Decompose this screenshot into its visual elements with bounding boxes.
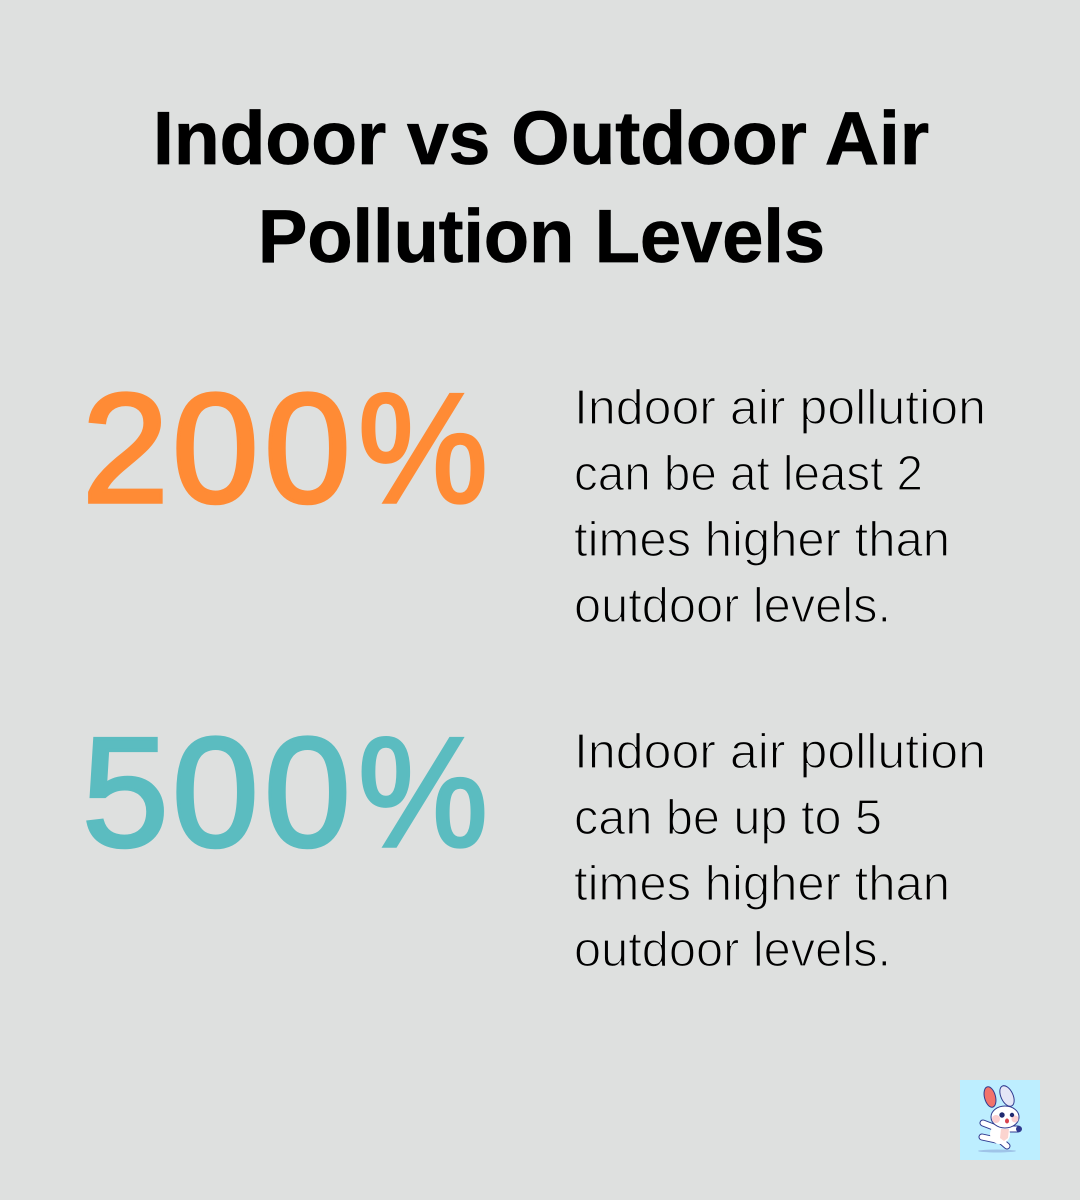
stat: 500%: [82, 706, 488, 880]
text block: 200% description: times higher than: [574, 512, 950, 567]
text block: 200% description: can be at least 2: [574, 446, 923, 501]
stat: 500%: %: [358, 706, 488, 880]
text block: 200% description: Indoor air pollution: [574, 380, 986, 435]
stat: 200%: %: [358, 362, 488, 536]
text block: 500% description: can be up to 5: [574, 790, 882, 845]
text block: 200% description: outdoor levels.: [574, 578, 891, 633]
icon: rabbit logo: [960, 1080, 1040, 1160]
title: Pollution Levels: [258, 194, 825, 278]
text block: 500% description: outdoor levels.: [574, 922, 891, 977]
text block: 500% description: times higher than: [574, 856, 950, 911]
text block: 500% description: Indoor air pollution: [574, 724, 986, 779]
stat: 500%: 500: [82, 706, 351, 880]
stat: 200%: [82, 362, 488, 536]
stat: 200%: 200: [82, 362, 351, 536]
text block: 200% description: [574, 380, 986, 633]
text block: 500% description: [574, 724, 986, 977]
title: Indoor vs Outdoor Air: [153, 96, 929, 180]
title: [153, 96, 929, 278]
